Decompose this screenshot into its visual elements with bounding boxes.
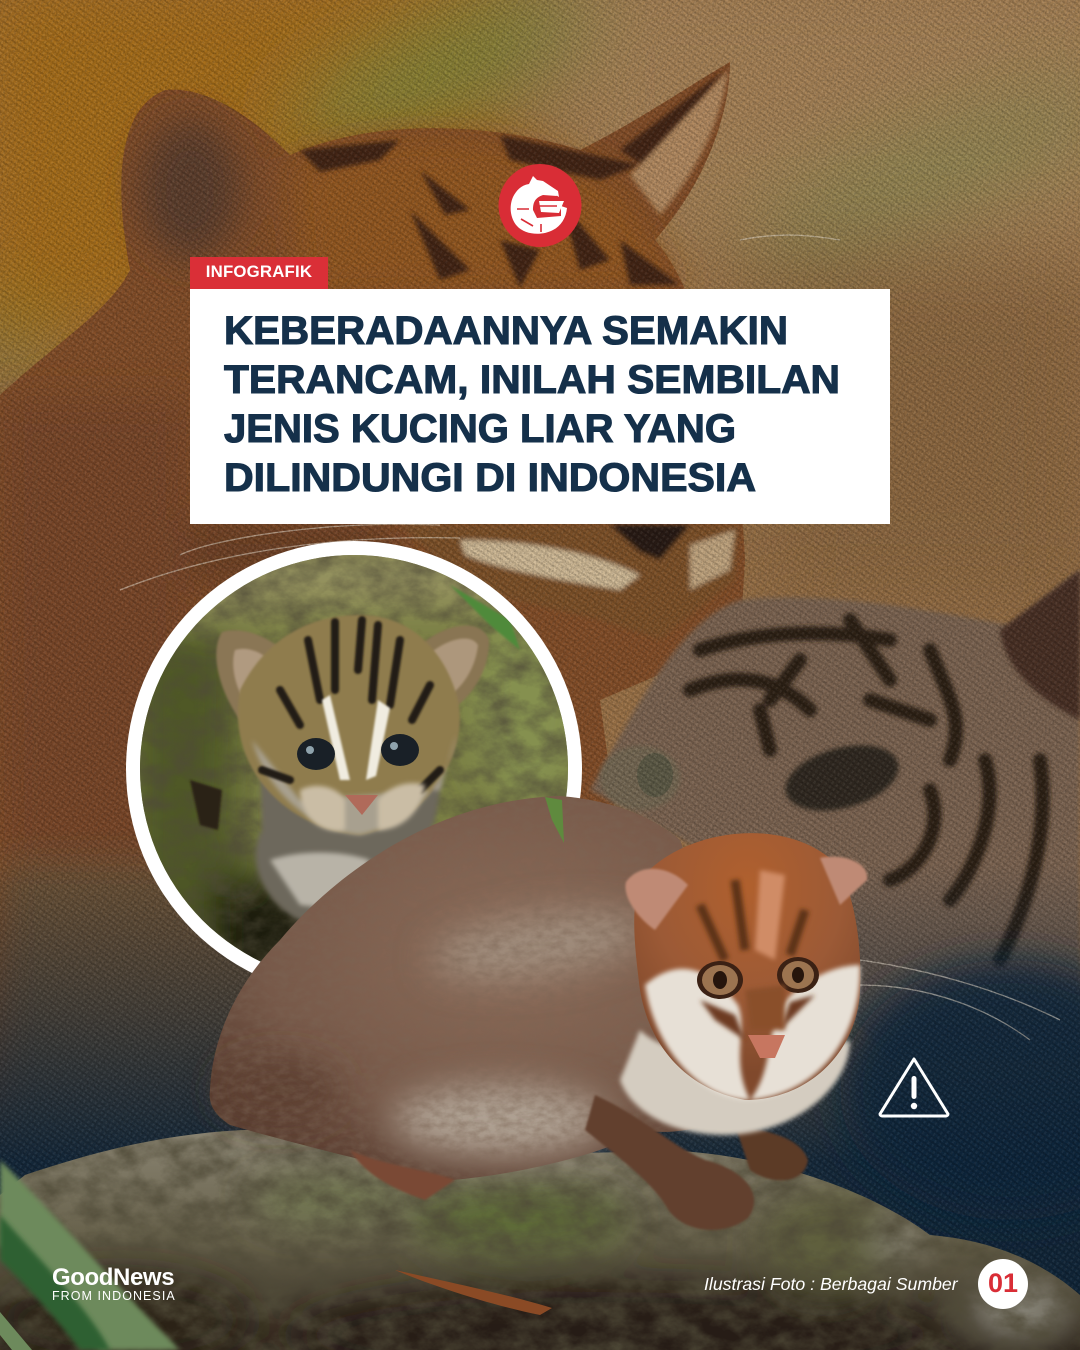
tiger face [590, 570, 1080, 1060]
grass blades [0, 1160, 180, 1350]
legs [585, 1095, 754, 1230]
title panel: TERANCAM, INILAH SEMBILAN [224, 358, 840, 402]
leaf [545, 797, 564, 843]
title panel: JENIS KUCING LIAR YANG [224, 407, 736, 451]
brand: GoodNews From Indonesia [52, 1264, 176, 1303]
big leopard cat head [0, 62, 745, 1200]
title panel: KEBERADAANNYA SEMAKIN [224, 309, 788, 353]
eyes [697, 961, 743, 999]
tag: INFOGRAFIK [190, 257, 328, 289]
muzzle [745, 985, 785, 1030]
title panel: DILINDUNGI DI INDONESIA [224, 456, 756, 500]
white chest [620, 1030, 850, 1135]
muzzle [400, 525, 740, 640]
nose [748, 1035, 785, 1058]
kitten [216, 615, 489, 925]
title panel [190, 289, 890, 524]
page number badge: 01 [988, 1268, 1018, 1298]
brand: GoodNews From Indonesia: FROM INDONESIA [52, 1289, 176, 1303]
fur texture [210, 798, 632, 1171]
photo credit: Ilustrasi Foto : Berbagai Sumber [704, 1274, 958, 1294]
rock [0, 1120, 1080, 1350]
cheeks [645, 969, 750, 1100]
icon: warning triangle [878, 1057, 950, 1118]
brand: GoodNews From Indonesia: GoodNews [52, 1264, 174, 1291]
circular photo: leopard cat kitten [126, 541, 582, 973]
whiskers [120, 235, 1060, 1040]
cat body [210, 796, 760, 1180]
logo badge [498, 164, 582, 247]
head [634, 833, 860, 1100]
ears [625, 869, 688, 930]
page number badge [978, 1259, 1028, 1309]
tag: INFOGRAFIK: INFOGRAFIK [206, 262, 312, 281]
